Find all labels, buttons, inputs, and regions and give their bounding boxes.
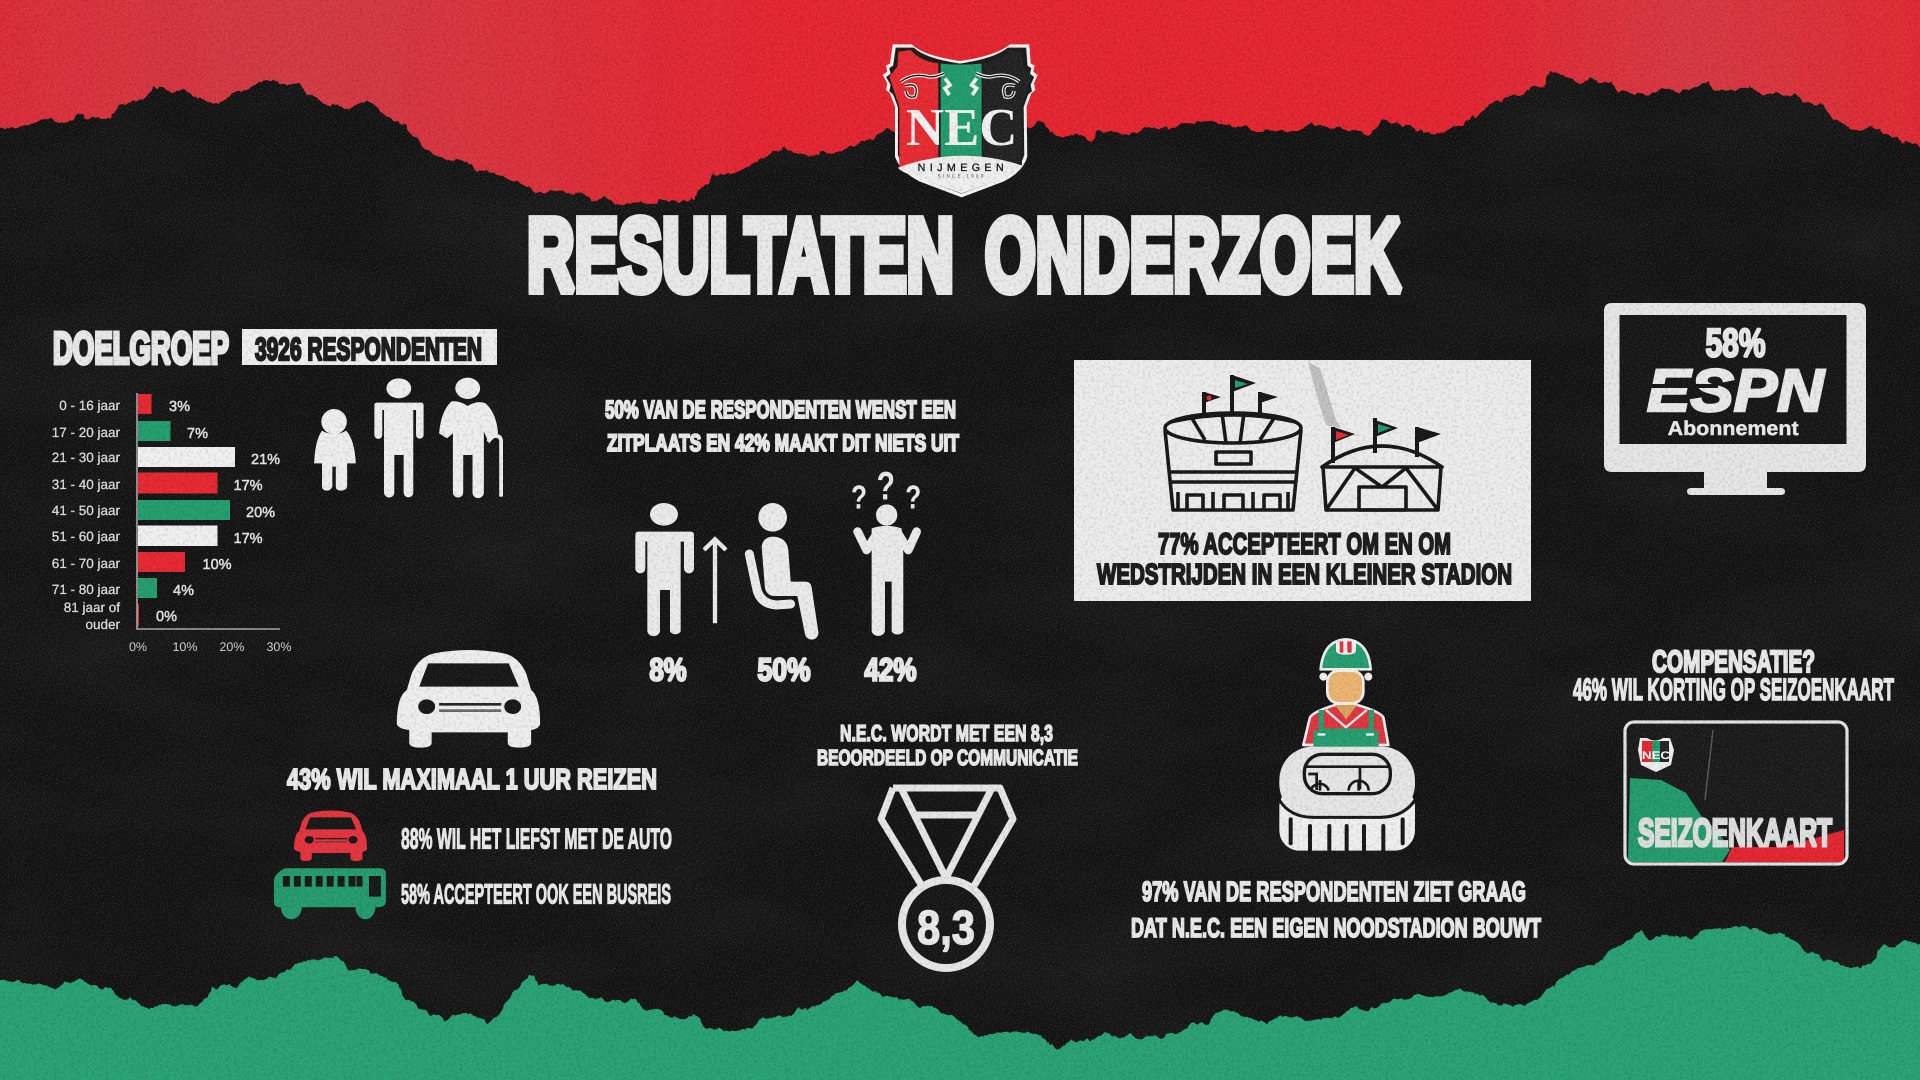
text: liefst met de auto: 88% WIL HET LIEFST MET DE AUTO [401,824,672,856]
bar chart: age groups: 21 - 30 jaar [52,450,120,465]
numbers: 8% 50% 42%: 8% [650,652,686,688]
icon: monitor with ESPN abonnement: 58% [1706,322,1766,366]
bar chart: age groups: 61 - 70 jaar [52,556,120,571]
title: RESULTATEN [527,198,954,312]
text: zitplaats wens [605,396,959,457]
bar chart: age groups: 10% [172,640,198,654]
bar chart: age groups: 20% [219,640,245,654]
icon: monitor with ESPN abonnement: Abonnement [1668,418,1799,440]
text: communicatie beoordeling: BEOORDEELD OP COMMUNICATIE [817,745,1078,770]
bar chart: age groups: 31 - 40 jaar [52,477,120,492]
bar chart: age groups: 10% [202,557,232,573]
bar chart: age groups: 0 - 16 jaar [59,398,120,413]
icon: medal with score 8,3: 8,3 [917,902,975,955]
bar chart: age groups: 3% [169,399,190,415]
band: torn green bottom [0,927,1920,1080]
text: zitplaats wens: ZITPLAATS EN 42% MAAKT DIT NIETS UIT [607,430,959,457]
numbers: 8% 50% 42% [650,652,916,688]
icon: small club crest on card [1638,738,1674,772]
bar chart: age groups: 0% [129,640,147,654]
bar chart: age groups: 71 - 80 jaar [52,582,120,597]
text: communicatie beoordeling [817,720,1078,770]
bar chart: age groups: 41 - 50 jaar [52,503,120,518]
bar chart: age groups: 0% [156,609,177,625]
text: compensatie [1573,644,1894,707]
icon: standing, arrow, seated and undecided figures [635,463,921,640]
logo: N.E.C. Nijmegen shield [883,44,1038,197]
icon: monitor with ESPN abonnement [1604,303,1866,495]
icon: construction worker above stadium [1279,639,1415,851]
title: ONDERZOEK [985,198,1401,312]
text: eigen noodstadion: DAT N.E.C. EEN EIGEN NOODSTADION BOUWT [1131,913,1541,943]
bar chart: age groups: 7% [187,426,208,442]
text: compensatie: COMPENSATIE? [1652,644,1815,679]
bar chart: age groups: 4% [173,583,194,599]
icon: green bus [274,868,386,919]
panel: kleiner stadion [1074,360,1531,601]
band: torn red top [0,0,1920,203]
bar chart: age groups: 21% [251,452,280,468]
bar chart: age groups [52,393,292,654]
bar chart: age groups: 81 jaar of [64,600,120,615]
icon: standing, arrow, seated and undecided figures: ? [851,478,867,516]
numbers: 8% 50% 42%: 50% [758,652,810,688]
logo: N.E.C. Nijmegen shield: NIJMEGEN [918,161,1004,173]
numbers: 8% 50% 42%: 42% [864,652,916,688]
icon: standing, arrow, seated and undecided figures: ? [905,478,921,516]
icon: seizoenkaart card [1625,722,1847,864]
text: eigen noodstadion [1131,876,1541,943]
bar chart: age groups: ouder [85,617,121,632]
heading: doelgroep: DOELGROEP [53,322,229,374]
panel: kleiner stadion: 77% ACCEPTEERT OM EN OM [1158,528,1451,561]
panel: kleiner stadion: WEDSTRIJDEN IN EEN KLEINER STADION [1097,559,1512,591]
text: maximaal 1 uur reizen: 43% WIL MAXIMAAL 1 UUR REIZEN [287,764,657,796]
text: communicatie beoordeling: N.E.C. WORDT MET EEN 8,3 [840,720,1053,746]
icon: medal with score 8,3 [881,788,1013,968]
icon: red car [294,810,367,861]
bar chart: age groups: 51 - 60 jaar [52,529,120,544]
bar chart: age groups: 30% [266,640,292,654]
logo: N.E.C. Nijmegen shield: NEC [906,97,1017,157]
bar chart: age groups: 17 - 20 jaar [52,425,120,440]
icon: monitor with ESPN abonnement: ESPN [1647,357,1826,424]
badge: 3926 respondenten [242,329,497,367]
icon: white car front [397,650,540,748]
bar chart: age groups: 20% [246,505,275,521]
icon: child, adult and elderly figures [314,378,501,498]
text: eigen noodstadion: 97% VAN DE RESPONDENTEN ZIET GRAAG [1142,876,1526,907]
logo: N.E.C. Nijmegen shield: SINCE 1900 [938,173,983,179]
icon: small club crest on card: NEC [1642,750,1670,762]
text: zitplaats wens: 50% VAN DE RESPONDENTEN WENST EEN [605,396,956,424]
icon: large stadium with flags [1165,375,1301,510]
badge: 3926 respondenten: 3926 RESPONDENTEN [255,331,482,367]
bar chart: age groups: 17% [234,478,263,494]
text: accepteert busreis: 58% ACCEPTEERT OOK EEN BUSREIS [401,878,671,910]
icon: standing, arrow, seated and undecided figures: ? [877,463,895,508]
bar chart: age groups: 17% [234,531,263,547]
icon: small stadium with flags [1322,418,1442,510]
